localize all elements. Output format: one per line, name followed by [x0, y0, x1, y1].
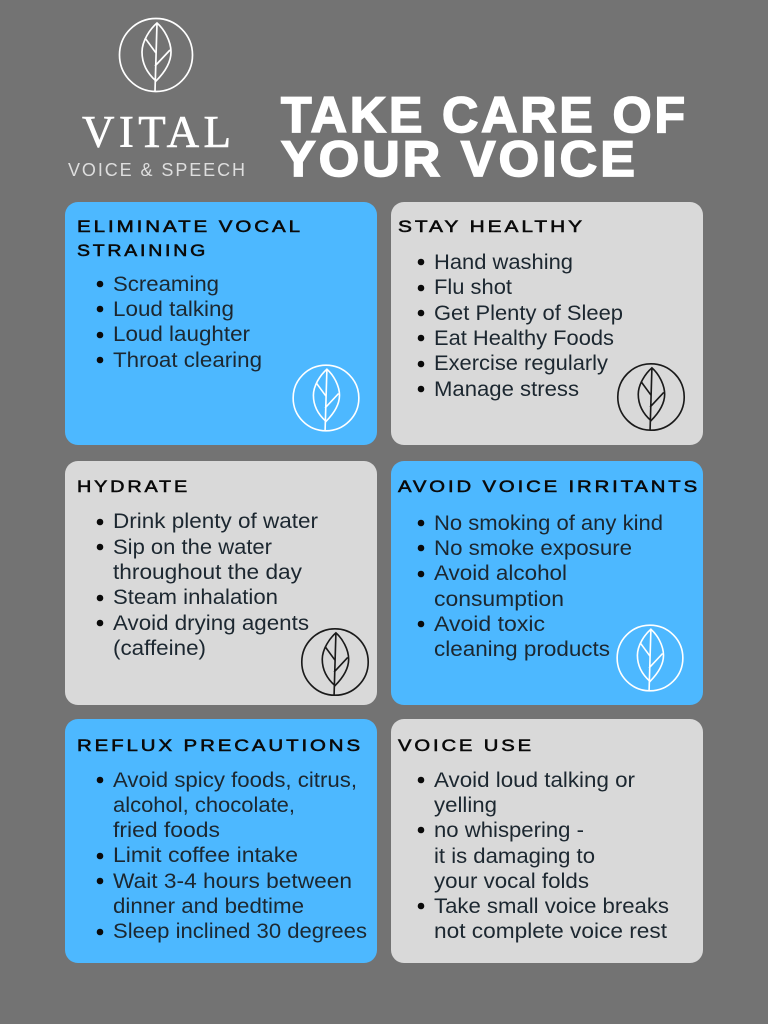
- panel: hydrate: [65, 461, 377, 705]
- heading: AVOID VOICE IRRITANTS: [398, 477, 700, 496]
- icon: dark leaf: [618, 364, 684, 430]
- logo tagline: VOICE & SPEECH: [68, 160, 245, 180]
- title: YOUR VOICE: [281, 131, 638, 187]
- heading: [77, 217, 303, 260]
- bullet list: dinner and bedtime: [113, 894, 304, 918]
- icon: white leaf: [617, 625, 683, 691]
- bullet list: Avoid toxic: [434, 612, 545, 636]
- bullet list: [418, 250, 623, 401]
- bullet list: [97, 272, 262, 372]
- logo wordmark: VITAL: [82, 107, 231, 157]
- panel: stay healthy: [391, 202, 703, 445]
- bullet list: not complete voice rest: [434, 919, 667, 943]
- heading: HYDRATE: [77, 477, 190, 496]
- panel: voice use: [391, 719, 703, 963]
- heading: STRAINING: [77, 241, 208, 260]
- heading: ELIMINATE VOCAL: [77, 217, 303, 236]
- heading: STAY HEALTHY: [398, 217, 585, 236]
- bullet list: [418, 511, 663, 661]
- icon: leaf in circle: [120, 18, 192, 92]
- bullet list: Get Plenty of Sleep: [434, 301, 623, 325]
- bullet list: Avoid spicy foods, citrus,: [113, 768, 357, 792]
- bullet list: alcohol, chocolate,: [113, 793, 295, 817]
- bullet list: Eat Healthy Foods: [434, 326, 614, 350]
- bullet list: yelling: [434, 793, 497, 817]
- panel: avoid voice irritants: [391, 461, 703, 705]
- bullet list: Exercise regularly: [434, 351, 608, 375]
- heading: REFLUX PRECAUTIONS: [77, 736, 363, 755]
- bullet list: Steam inhalation: [113, 585, 278, 609]
- bullet list: Avoid drying agents: [113, 611, 309, 635]
- bullet list: Loud talking: [113, 297, 234, 321]
- panel: eliminate vocal straining: [65, 202, 377, 445]
- bullet list: throughout the day: [113, 560, 302, 584]
- bullet list: Throat clearing: [113, 348, 262, 372]
- title: TAKE CARE OF: [281, 87, 688, 143]
- bullet list: Sleep inclined 30 degrees: [113, 919, 367, 943]
- bullet list: your vocal folds: [434, 869, 589, 893]
- bullet list: it is damaging to: [434, 844, 595, 868]
- bullet list: Flu shot: [434, 275, 512, 299]
- bullet list: No smoking of any kind: [434, 511, 663, 535]
- bullet list: Drink plenty of water: [113, 509, 318, 533]
- bullet list: [97, 768, 367, 943]
- bullet list: Hand washing: [434, 250, 573, 274]
- icon: white leaf: [293, 365, 359, 431]
- bullet list: no whispering -: [434, 818, 584, 842]
- title: [281, 87, 688, 187]
- bullet list: Manage stress: [434, 377, 579, 401]
- bullet list: No smoke exposure: [434, 536, 632, 560]
- bullet list: Loud laughter: [113, 322, 250, 346]
- bullet list: Wait 3-4 hours between: [113, 869, 352, 893]
- bullet list: Limit coffee intake: [113, 843, 298, 867]
- bullet list: Avoid alcohol: [434, 561, 567, 585]
- bullet list: [418, 768, 669, 943]
- bullet list: fried foods: [113, 818, 220, 842]
- bullet list: cleaning products: [434, 637, 610, 661]
- bullet list: Screaming: [113, 272, 219, 296]
- logo: Vital Voice & Speech: [68, 18, 245, 180]
- bullet list: [97, 509, 318, 660]
- icon: dark leaf: [302, 629, 368, 695]
- bullet list: (caffeine): [113, 636, 206, 660]
- heading: VOICE USE: [398, 736, 534, 755]
- panel: reflux precautions: [65, 719, 377, 963]
- bullet list: consumption: [434, 587, 564, 611]
- bullet list: Sip on the water: [113, 535, 272, 559]
- bullet list: Take small voice breaks: [434, 894, 669, 918]
- bullet list: Avoid loud talking or: [434, 768, 635, 792]
